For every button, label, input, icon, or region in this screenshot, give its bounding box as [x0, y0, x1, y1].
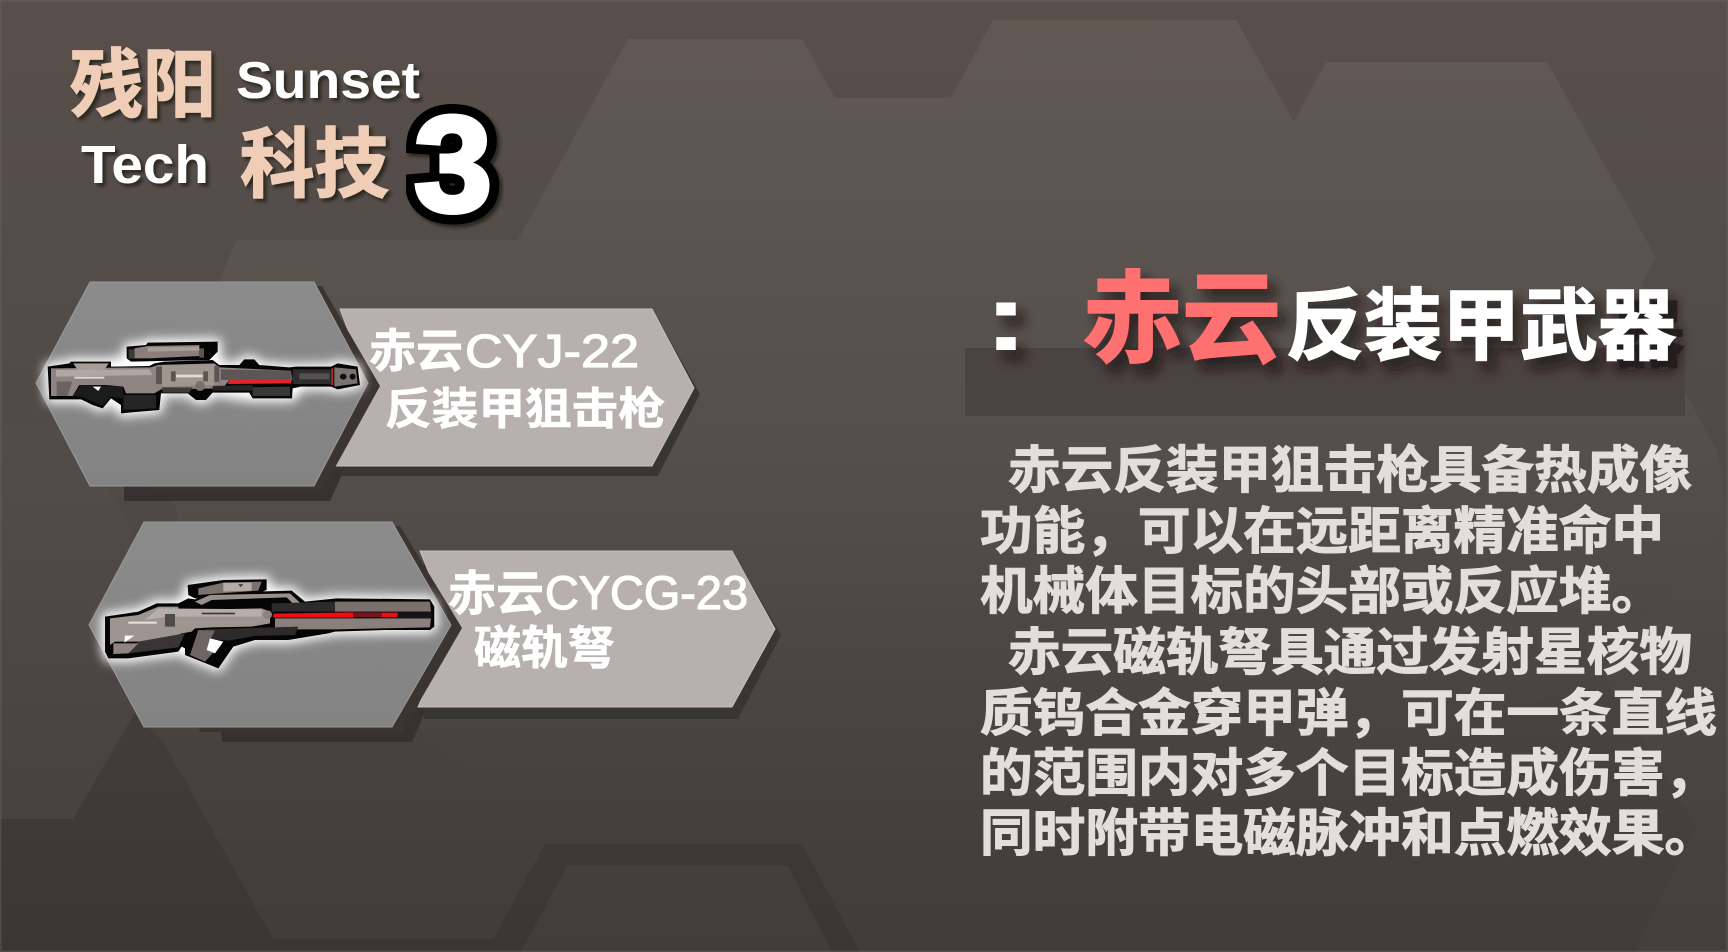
description text: 功能，可以在远距离精准命中: [980, 503, 1664, 560]
label arrow 1: [336, 309, 694, 466]
description text: 机械体目标的头部或反应堆。: [980, 563, 1664, 620]
weapon card 2: [89, 522, 781, 742]
weapon card 1: [36, 282, 700, 501]
description text: 质钨合金穿甲弹，可在一条直线: [980, 685, 1717, 742]
hex 2 edge: [152, 526, 462, 732]
label 1 line 2: 反装甲狙击枪: [385, 385, 665, 434]
label 2 line 2: 磁轨弩: [474, 622, 615, 674]
description text: 同时附带电磁脉冲和点燃效果。: [980, 805, 1717, 862]
gun 2: [105, 579, 434, 668]
title backing bar: [965, 348, 1685, 416]
label 2 line 1: [448, 566, 748, 621]
description text: 的范围内对多个目标造成伤害，: [980, 745, 1717, 802]
logo: number 3: 3: [414, 88, 492, 240]
description text: 赤云反装甲狙击枪具备热成像: [1008, 442, 1692, 499]
hex 1: [36, 282, 368, 486]
label arrow 2 shadow: [424, 561, 781, 719]
description text: [980, 442, 1717, 862]
label 1 line 1: [369, 325, 639, 377]
logo: Tech: Tech: [81, 135, 209, 195]
logo: number 3: 3: [414, 88, 492, 240]
gun 1: [48, 342, 360, 413]
hex 2: [89, 522, 451, 727]
logo title: [70, 43, 492, 240]
label 2 line 1: 赤云: [448, 568, 544, 621]
label arrow 2: [418, 551, 775, 707]
title red part: 赤云: [1083, 264, 1281, 376]
section title: [965, 264, 1686, 416]
hex 2 shadow: [204, 540, 460, 742]
label 1 line 1: 赤云: [369, 325, 463, 377]
logo: Sunset: Sunset: [236, 52, 420, 110]
title colon: :: [983, 265, 1029, 370]
logo: 科技: 科技: [240, 123, 389, 208]
hex 1 shadow: [124, 300, 378, 501]
title white part: 反装甲武器: [1286, 282, 1676, 370]
label 2 line 1: CYCG-23: [545, 566, 748, 619]
label arrow 1 shadow: [340, 319, 700, 476]
hex 1 edge: [98, 286, 380, 491]
logo: 残阳: 残阳: [70, 43, 216, 127]
description text: 赤云磁轨弩具通过发射星核物: [1008, 624, 1692, 681]
ghost title glyph: 器: [1610, 294, 1686, 379]
label 1 line 1: CYJ-22: [465, 325, 639, 377]
